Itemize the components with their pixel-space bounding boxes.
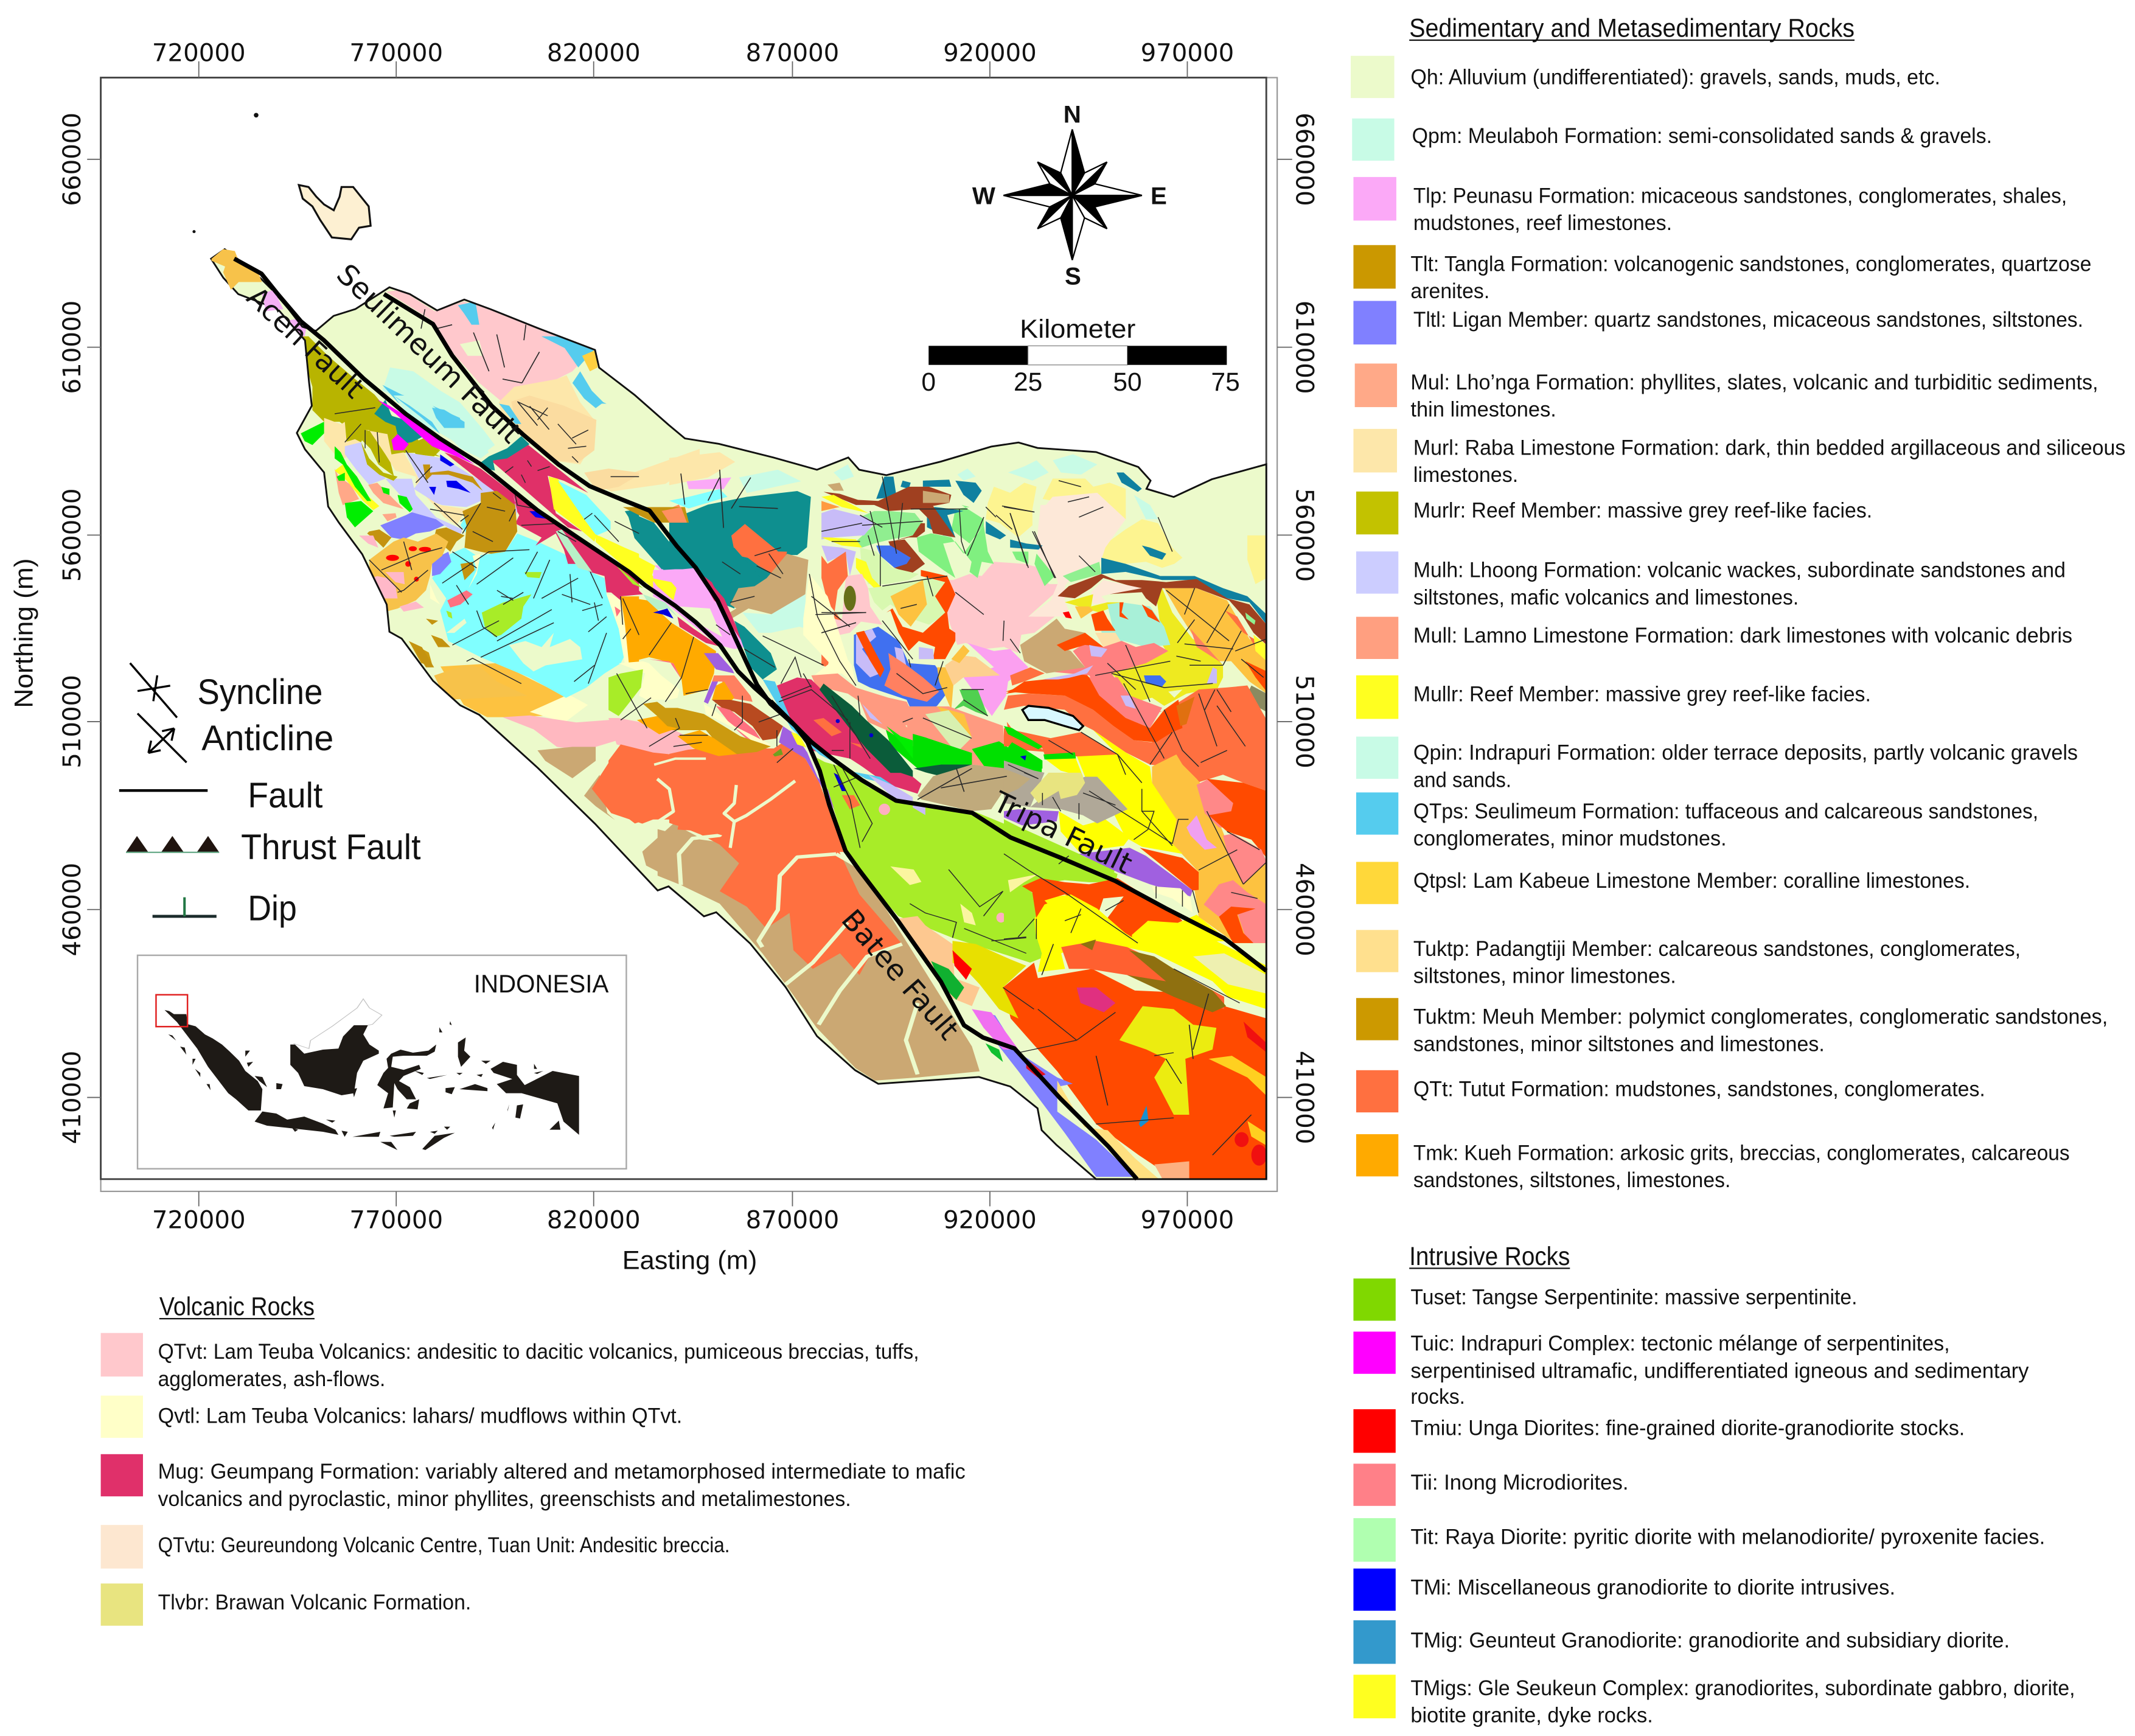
bottom axis labels: 820000 <box>547 1206 641 1234</box>
legend entry: Mug: volcanics and pyroclastic, minor phyllites, greenschists and metalimestones. <box>158 1487 851 1511</box>
legend entry: Tii: Tii: Inong Microdiorites. <box>1410 1471 1629 1494</box>
symbol: thrust fault <box>126 836 219 853</box>
legend entry: Tuktm: Tuktm: Meuh Member: polymict conglomerates, conglomeratic sandstones, <box>1413 1005 2108 1029</box>
left axis labels: 610000 <box>58 301 86 394</box>
bottom axis labels: 970000 <box>1141 1206 1234 1234</box>
legend entry: QTvt <box>101 1333 919 1391</box>
scale bar: 50 <box>1113 368 1142 397</box>
right axis labels <box>1290 113 1318 1144</box>
top axis labels: 970000 <box>1141 40 1234 68</box>
fault labels: Tripa Fault <box>987 785 1137 881</box>
legend entry: Tlt <box>1353 245 2091 303</box>
legend entry: Tuktm: sandstones, minor siltstones and limestones. <box>1413 1032 1825 1056</box>
legend entry: Tuic: Tuic: Indrapuri Complex: tectonic mélange of serpentinites, <box>1410 1332 1950 1356</box>
heading: Sedimentary and Metasedimentary Rocks <box>1409 14 1855 43</box>
legend entry: TMigs: biotite granite, dyke rocks. <box>1410 1704 1653 1727</box>
legend entry: Qpm <box>1352 119 1992 161</box>
legend entry: Qpm: Qpm: Meulaboh Formation: semi-consolidated sands & gravels. <box>1412 124 1992 148</box>
legend entry: Tuktp <box>1356 930 2021 988</box>
left axis labels: 660000 <box>58 113 86 206</box>
bottom axis labels: 770000 <box>349 1206 443 1234</box>
legend entry: Tlp: Tlp: Peunasu Formation: micaceous sandstones, conglomerates, shales, <box>1413 184 2067 207</box>
legend entry: Tit <box>1353 1518 2045 1562</box>
legend entry: Mul: thin limestones. <box>1410 398 1556 422</box>
legend entry: Mug <box>101 1454 966 1511</box>
legend entry: Tmiu: Tmiu: Unga Diorites: fine-grained diorite-granodiorite stocks. <box>1410 1416 1965 1440</box>
legend entry: Qh: Qh: Alluvium (undifferentiated): gravels, sands, muds, etc. <box>1410 66 1940 89</box>
top axis labels: 820000 <box>547 40 641 68</box>
legend entry: Tuic <box>1353 1331 2029 1409</box>
symbol legend: Anticline <box>201 719 333 758</box>
legend entry: Tuktm <box>1356 998 2108 1056</box>
Weh island and islets <box>192 113 371 311</box>
fault labels: Aceh Fault <box>240 281 371 405</box>
legend entry: Tlt: Tlt: Tangla Formation: volcanogenic sandstones, conglomerates, quartzose <box>1410 252 2091 276</box>
axis title: easting: Easting (m) <box>622 1246 757 1275</box>
legend panel: intrusive rocks <box>1353 1243 2075 1727</box>
legend entry: TMi: TMi: Miscellaneous granodiorite to diorite intrusives. <box>1410 1575 1895 1599</box>
right axis labels: 610000 <box>1290 301 1318 394</box>
thin faults <box>335 309 1267 1155</box>
top axis labels <box>152 40 1234 68</box>
red locator box <box>156 995 187 1027</box>
left axis labels: 460000 <box>58 863 86 957</box>
coastline <box>211 249 1266 1179</box>
symbol legend: Fault <box>248 776 322 815</box>
legend entry: Tlt: arenites. <box>1410 279 1489 303</box>
legend entry: QTps: conglomerates, minor mudstones. <box>1413 827 1727 851</box>
compass letters: S <box>1065 263 1081 290</box>
legend entry: Qpin: Qpin: Indrapuri Formation: older terrace deposits, partly volcanic gravels <box>1413 741 2078 765</box>
legend entry: TMi <box>1353 1569 1895 1611</box>
symbol legend: Dip <box>248 889 297 929</box>
legend entry: Murl: Murl: Raba Limestone Formation: dark, thin bedded argillaceous and siliceous <box>1413 436 2125 459</box>
legend entry: Tmk: Tmk: Kueh Formation: arkosic grits, breccias, conglomerates, calcareous <box>1413 1141 2070 1165</box>
legend entry: TMig <box>1353 1620 2010 1664</box>
map frames <box>101 78 1277 1191</box>
legend entry: Tlp <box>1353 177 2067 235</box>
top axis labels: 770000 <box>349 40 443 68</box>
inset map: Indonesia <box>138 955 626 1169</box>
legend entry: Mullr <box>1356 675 1871 719</box>
legend entry: Tuktp: siltstones, minor limestones. <box>1413 964 1676 988</box>
legend entry: Qtpsl: Qtpsl: Lam Kabeue Limestone Member: coralline limestones. <box>1413 869 1970 893</box>
fault labels <box>240 257 1137 1047</box>
right axis labels: 460000 <box>1290 863 1318 957</box>
legend entry: TMigs: TMigs: Gle Seukeun Complex: granodiorites, subordinate gabbro, diorite, <box>1410 1676 2075 1700</box>
right axis labels: 560000 <box>1290 489 1318 582</box>
legend entry: Tltl: Tltl: Ligan Member: quartz sandstones, micaceous sandstones, siltstones. <box>1413 308 2083 332</box>
legend entry: Murl: limestones. <box>1413 463 1518 487</box>
legend entry: Mullr: Mullr: Reef Member: massive grey reef-like facies. <box>1413 682 1871 706</box>
compass letters: E <box>1151 183 1167 210</box>
heading: Intrusive Rocks <box>1409 1243 1570 1271</box>
legend entry: Mulh: siltstones, mafic volcanics and limestones. <box>1413 586 1799 610</box>
compass letters: N <box>1064 100 1081 128</box>
fault labels: Seulimeum Fault <box>330 257 528 450</box>
left axis labels: 410000 <box>58 1051 86 1144</box>
geological units <box>214 262 1266 1178</box>
legend entry: Mull <box>1356 617 2072 659</box>
lake <box>1022 706 1083 730</box>
major faults <box>234 259 1266 1179</box>
icon: compass rose <box>1003 130 1142 260</box>
legend entry: Tuset <box>1353 1278 1857 1321</box>
legend entry: Tuic: serpentinised ultramafic, undifferentiated igneous and sedimentary <box>1410 1359 2029 1382</box>
scale bar <box>921 315 1240 397</box>
left axis labels <box>58 113 86 1144</box>
axis title: northing: Northing (m) <box>10 558 39 708</box>
heading: Volcanic Rocks <box>159 1293 315 1322</box>
left axis labels: 510000 <box>58 675 86 769</box>
legend entry: Tuic: rocks. <box>1410 1385 1465 1409</box>
symbol legend <box>119 663 421 929</box>
legend entry: Tlvbr: Tlvbr: Brawan Volcanic Formation. <box>158 1591 471 1614</box>
scale bar: 0 <box>921 368 936 397</box>
top axis labels: 920000 <box>943 40 1037 68</box>
legend entry: Murlr: Murlr: Reef Member: massive grey reef-like facies. <box>1413 498 1872 522</box>
legend entry: Mul: Mul: Lho’nga Formation: phyllites, slates, volcanic and turbiditic sediments, <box>1410 371 2098 394</box>
Indonesia silhouette <box>165 999 579 1150</box>
legend entry: Murlr <box>1356 492 1872 534</box>
scale bar: 75 <box>1211 368 1240 397</box>
legend entry: Qtpsl <box>1356 862 1970 904</box>
legend entry: Qh <box>1351 56 1940 98</box>
legend entry: QTt <box>1356 1070 1985 1112</box>
right axis labels: 660000 <box>1290 113 1318 206</box>
legend entry: Murl <box>1353 429 2125 487</box>
legend entry: Mul <box>1355 363 2098 422</box>
legend entry: Tlvbr <box>101 1583 471 1626</box>
legend entry: QTt: QTt: Tutut Formation: mudstones, sandstones, conglomerates. <box>1413 1077 1985 1101</box>
legend entry: Qpin: and sands. <box>1413 768 1511 792</box>
legend entry: Tlp: mudstones, reef limestones. <box>1413 211 1672 235</box>
top axis labels: 870000 <box>746 40 839 68</box>
legend entry: TMigs <box>1353 1675 2075 1727</box>
legend entry: QTps <box>1356 792 2038 851</box>
legend panel: volcanic rocks <box>101 1293 966 1626</box>
map panel <box>10 40 1318 1275</box>
legend entry: QTvtu <box>101 1525 730 1569</box>
symbol: fault <box>119 790 207 791</box>
legend entry: Tmiu <box>1353 1409 1965 1453</box>
legend entry: Tit: Tit: Raya Diorite: pyritic diorite with melanodiorite/ pyroxenite facies. <box>1410 1525 2045 1549</box>
legend entry: QTps: QTps: Seulimeum Formation: tuffaceous and calcareous sandstones, <box>1413 800 2038 823</box>
legend entry: Mug: Mug: Geumpang Formation: variably altered and metamorphosed intermediate to mafic <box>158 1460 966 1483</box>
legend entry: Tmk: sandstones, siltstones, limestones. <box>1413 1168 1730 1192</box>
bottom axis labels <box>152 1206 1234 1234</box>
legend entry: QTvt: agglomerates, ash-flows. <box>158 1367 385 1391</box>
symbol: anticline <box>138 714 187 762</box>
scale bar: 25 <box>1014 368 1042 397</box>
legend entry: Tuset: Tuset: Tangse Serpentinite: massive serpentinite. <box>1410 1286 1857 1309</box>
scale bar: Kilometer <box>1020 315 1135 344</box>
bottom axis labels: 720000 <box>152 1206 246 1234</box>
legend entry: Mulh: Mulh: Lhoong Formation: volcanic wackes, subordinate sandstones and <box>1413 559 2066 582</box>
legend entry: Qvtl: Qvtl: Lam Teuba Volcanics: lahars/ mudflows within QTvt. <box>158 1404 682 1427</box>
legend entry: Qpin <box>1356 737 2078 792</box>
bottom axis labels: 920000 <box>943 1206 1037 1234</box>
left axis labels: 560000 <box>58 489 86 582</box>
compass letters: W <box>972 183 995 210</box>
bottom axis labels: 870000 <box>746 1206 839 1234</box>
right axis labels: 510000 <box>1290 675 1318 769</box>
legend entry: QTvtu: QTvtu: Geureundong Volcanic Centre, Tuan Unit: Andesitic breccia. <box>158 1533 730 1557</box>
top axis labels: 720000 <box>152 40 246 68</box>
legend entry: QTvt: QTvt: Lam Teuba Volcanics: andesitic to dacitic volcanics, pumiceous breccias, tuffs, <box>158 1340 919 1364</box>
symbol: dip <box>153 898 217 916</box>
legend entry: Tltl <box>1353 301 2083 344</box>
compass letters <box>972 100 1167 290</box>
legend entry: Tuktp: Tuktp: Padangtiji Member: calcareous sandstones, conglomerates, <box>1413 937 2021 961</box>
symbol legend: Syncline <box>197 672 322 712</box>
symbol: syncline <box>130 663 177 717</box>
inset map: Indonesia: INDONESIA <box>474 970 609 998</box>
symbol legend: Thrust Fault <box>241 828 421 867</box>
legend entry: Tmk <box>1356 1134 2070 1192</box>
axis ticks <box>87 61 1292 1207</box>
legend entry: Mulh <box>1356 551 2066 610</box>
legend panel: sedimentary and metasedimentary rocks <box>1351 14 2125 1192</box>
legend entry: Mull: Mull: Lamno Limestone Formation: dark limestones with volcanic debris <box>1413 624 2072 647</box>
legend entry: Tii <box>1353 1463 1629 1506</box>
legend entry: TMig: TMig: Geunteut Granodiorite: granodiorite and subsidiary diorite. <box>1410 1629 2010 1653</box>
right axis labels: 410000 <box>1290 1051 1318 1144</box>
fault labels: Batee Fault <box>835 903 965 1047</box>
legend entry: Qvtl <box>101 1396 682 1438</box>
